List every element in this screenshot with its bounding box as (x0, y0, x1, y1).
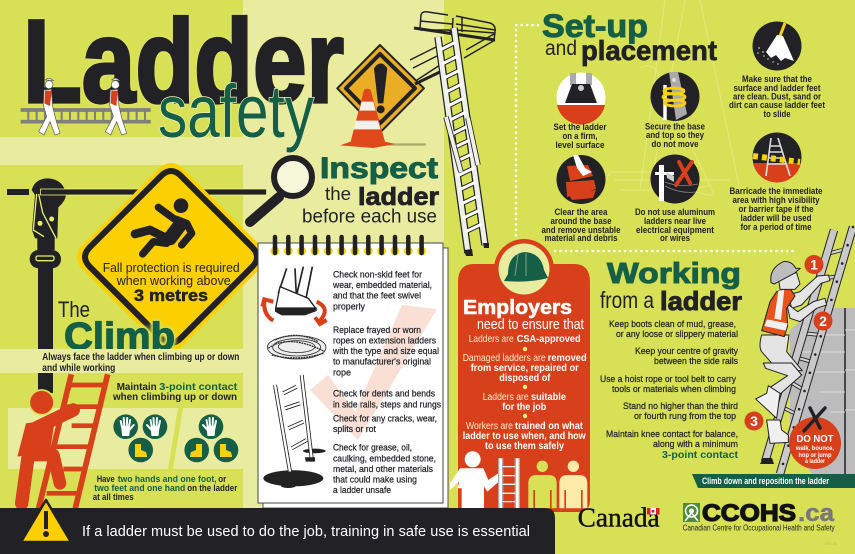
text: clean surface: are clean. Dust, sand or (733, 92, 821, 102)
footer bar (0, 500, 555, 554)
text: clean surface: dirt can cause ladder feet (729, 100, 826, 111)
worker lower body (756, 363, 802, 443)
panels: 3-point contact backgrounds (8, 408, 243, 469)
heading: Inspect the ladder before each use: ladder (358, 183, 439, 211)
heading: Set-up and placement: placement (581, 35, 717, 66)
strap continuing below band (38, 373, 53, 393)
text: employer duties: CSA-approved (517, 334, 581, 345)
text: checklist (332, 270, 441, 496)
warning sign: fall protection (85, 171, 257, 343)
text: employer duties (463, 334, 587, 452)
icon: trainer, ladder and workers (450, 451, 587, 508)
text: fall protection: when working above (116, 273, 231, 288)
badge: 1 (804, 255, 824, 274)
text: barricade: area with high visibility (732, 195, 820, 206)
far arm (787, 298, 827, 322)
icon: climbing person (17, 390, 73, 503)
heading: Working from a ladder: from a (600, 287, 654, 313)
badge: 3: 3 (750, 413, 758, 429)
text: secure base: do not move (652, 139, 698, 150)
heading: Inspect the ladder before each use: Inspect (320, 152, 438, 185)
notebook rings (270, 237, 426, 256)
text: two hands and one foot: Have (97, 474, 115, 485)
text: employer duties: Damaged ladders are (463, 353, 546, 364)
text: checklist: ropes on extension ladders (333, 336, 436, 347)
text: fall protection: 3 metres (134, 286, 208, 305)
text: working rules: Maintain knee contact for balance, (606, 429, 738, 440)
text: secure base (645, 122, 705, 150)
icon: hard hat (498, 244, 550, 294)
text: employer duties: for the job (502, 402, 546, 413)
text: clear the area: material and debris (544, 233, 618, 244)
text: firm level surface: Set the ladder (554, 122, 607, 133)
torso and hips (760, 335, 802, 371)
heading: Inspect the ladder before each use (302, 152, 439, 228)
text: barricade (730, 186, 822, 233)
text: two hands and one foot: at all times (93, 492, 134, 503)
icon: orange ladder (39, 374, 108, 508)
illustration: worker on a ladder against a wall (756, 227, 855, 474)
text: checklist: splits or rot (333, 424, 376, 435)
text: employer duties: ladder to use when, and how (463, 431, 586, 442)
logo: CCOHS: CCOHS (702, 500, 796, 527)
text: clear the area (542, 207, 620, 244)
text: employer duties: Ladders are (469, 334, 514, 345)
icon: firm level surface (556, 72, 606, 125)
heading: Set-up and placement (542, 8, 717, 66)
worker upper body (760, 262, 830, 371)
text: training message: If a ladder must be used to do the job, training in safe use is essential (82, 524, 530, 540)
text: always face the ladder: Always face the ladder when climbing up or down (42, 351, 239, 363)
text: checklist: in side rails, steps and rungs (333, 399, 441, 410)
text: maintain 3-point contact (112, 381, 238, 403)
text: aluminum ladders: Do not use aluminum (635, 207, 715, 218)
badge: 3 (744, 412, 764, 430)
heading: The Climb (58, 297, 175, 358)
text: clean surface: Make sure that the (742, 74, 812, 85)
title: safety: safety (158, 70, 314, 153)
text: always face the ladder: and while working (42, 362, 115, 374)
logo: CCOHS (683, 500, 835, 533)
text: firm level surface (554, 122, 607, 151)
text: working rules: Stand no higher than the third (623, 401, 738, 412)
text: checklist: Check non-skid feet for (333, 270, 423, 281)
illustration: platform and extension ladder (410, 12, 495, 256)
text: checklist: wear, embedded material, (332, 280, 432, 291)
text: two hands and one foot: two hands and one foot, (118, 474, 217, 485)
logo: CCOHS: .ca (798, 500, 835, 527)
icon: workers carrying a ladder (21, 78, 151, 135)
text: employer duties: to use them safely (485, 441, 564, 452)
callout: do not: DO NOT (796, 434, 834, 445)
text: clean surface: surface and ladder feet (734, 83, 821, 94)
text: firm level surface: on a firm, (562, 131, 598, 142)
text: fall protection (103, 260, 240, 305)
text: checklist: rope (333, 367, 351, 378)
text: checklist: that could make using (333, 474, 417, 485)
ghost ladder background (600, 0, 740, 195)
text: clean surface (729, 74, 826, 120)
text: two hands and one foot: two feet and one hand (94, 483, 185, 494)
heading: The Climb: The (58, 297, 90, 322)
heading: Employers: Employers (463, 296, 572, 319)
icon: warning triangle (21, 500, 71, 542)
icon: rope coil (267, 335, 326, 359)
text: maintain 3-point contact: when climbing up or down (112, 391, 237, 403)
heading: Inspect the ladder before each use: the (325, 184, 351, 204)
wall (790, 308, 855, 474)
text: clear the area: Clear the area (554, 207, 608, 218)
check mark watermark (310, 305, 437, 440)
text: checklist: with the type and size equal (332, 346, 439, 357)
near arm (788, 275, 830, 308)
badge: 2 (814, 312, 832, 330)
badge: 2: 2 (819, 313, 827, 329)
text: checklist: Replace frayed or worn (333, 325, 421, 336)
heading: The Climb: Climb (64, 316, 175, 358)
panel: employers (450, 239, 590, 512)
dotted connector lines (516, 25, 797, 251)
pale band behind text (0, 349, 243, 373)
icon: ladder with spill (263, 375, 326, 488)
text: working rules: Keep your centre of gravity (635, 346, 738, 357)
text: checklist: to manufacturer's original (333, 356, 431, 367)
icons: two hands and one foot (113, 414, 167, 462)
icon: broom (752, 22, 802, 70)
text: checklist: caulking, embedded stone, (333, 453, 436, 464)
icons: one hand and two feet (184, 414, 238, 462)
text: working rules: Keep boots clean of mud, grease, (609, 319, 736, 330)
text: maintain 3-point contact: Maintain (117, 381, 157, 393)
version code: 2021-05 (824, 542, 837, 546)
icon: harness strap and hook (7, 178, 266, 380)
text: employer duties: suitable (531, 392, 566, 403)
text: barricade: ladder will be used (740, 213, 812, 224)
text: barricade: Barricade the immediate (730, 186, 822, 197)
text: aluminum ladders: electrical equipment (636, 225, 715, 236)
heading: Working from a ladder (600, 258, 742, 316)
text: aluminum ladders: ladders near live (644, 216, 706, 227)
badge: 1: 1 (810, 256, 818, 272)
text: working rules: or any loose or slippery material (616, 329, 738, 340)
heading: Inspect the ladder before each use: before each use (302, 206, 437, 228)
text: always face the ladder (42, 351, 239, 374)
text: working rules: along with a minimum (653, 439, 738, 450)
text: clear the area: around the base (550, 216, 612, 227)
icon: secure base and top (650, 72, 700, 121)
text: two hands and one foot: on the ladder (187, 483, 238, 494)
text: working rules: 3-point contact (662, 449, 739, 461)
text: aluminum ladders (635, 207, 715, 244)
text: clear the area: and remove unstable (542, 225, 620, 236)
text: firm level surface: level surface (556, 140, 604, 151)
text: two hands and one foot: or (218, 474, 227, 485)
icon: magnifying glass (250, 158, 312, 222)
text: checklist: Check for any cracks, wear, (333, 414, 437, 425)
text: working rules: tools or materials when climbing (612, 384, 736, 395)
text: checklist: a ladder unsafe (333, 485, 391, 496)
text: checklist: properly (333, 301, 365, 312)
text: checklist: metal, and other materials (333, 464, 433, 475)
text: clean surface: to slide (764, 109, 790, 120)
icon: barricade tape (752, 132, 802, 183)
text: employer duties: Ladders are (483, 392, 529, 403)
icon: clear the area (556, 155, 606, 204)
text: employer duties: disposed of (499, 373, 551, 384)
text: secure base: Secure the base (645, 122, 705, 132)
text: checklist: Check for dents and bends (333, 389, 435, 400)
callout: do not: walk, bounce, (795, 445, 834, 452)
text: two hands and one foot (93, 474, 238, 503)
text: working rules: Use a hoist rope or tool belt to carry (600, 374, 736, 385)
text: secure base: and top so they (646, 130, 705, 141)
safety vest (762, 288, 795, 337)
heading: Working from a ladder: ladder (660, 286, 742, 316)
callout: do not: hop or jump (798, 452, 832, 459)
text: working rules: between the side rails (654, 356, 738, 367)
logo: Canada wordmark: Canada (578, 503, 660, 533)
text: barricade: or barrier tape if the (738, 204, 814, 215)
text: barricade: for a period of time (740, 222, 812, 233)
text: working rules (600, 319, 739, 461)
icon: no aluminum near wires (650, 154, 700, 204)
heading: Working from a ladder: Working (607, 258, 741, 290)
icon: falling person (135, 198, 192, 254)
icon: non-skid foot (262, 267, 327, 324)
text: aluminum ladders: or wires (660, 233, 690, 244)
text: employer duties: from service, repaired or (471, 363, 579, 374)
text: fall protection: Fall protection is required (103, 260, 240, 275)
callout: do not: a ladder (805, 458, 825, 465)
callout: do not (789, 408, 841, 469)
panel: notebook inspection checklist (258, 237, 448, 508)
text: checklist: Check for grease, oil, (333, 443, 412, 454)
text: maintain 3-point contact: 3-point contact (159, 381, 238, 393)
ladder rails and rungs (765, 227, 853, 474)
pale strip (0, 137, 243, 165)
head (778, 273, 800, 289)
pale centre background (243, 0, 444, 510)
subheading: need to ensure that (477, 317, 584, 333)
text: employer duties: removed (548, 353, 587, 364)
text: employer duties: Workers are (466, 421, 513, 432)
heading: Set-up and placement: Set-up (542, 8, 648, 44)
hard hat (771, 262, 800, 284)
text: working rules: or fourth rung from the top (634, 411, 736, 422)
text: employer duties: trained on what (515, 421, 584, 432)
heading: Set-up and placement: and (545, 37, 577, 60)
text: checklist: and that the feet swivel (333, 291, 421, 302)
icon: warning sign and cone (337, 45, 426, 148)
